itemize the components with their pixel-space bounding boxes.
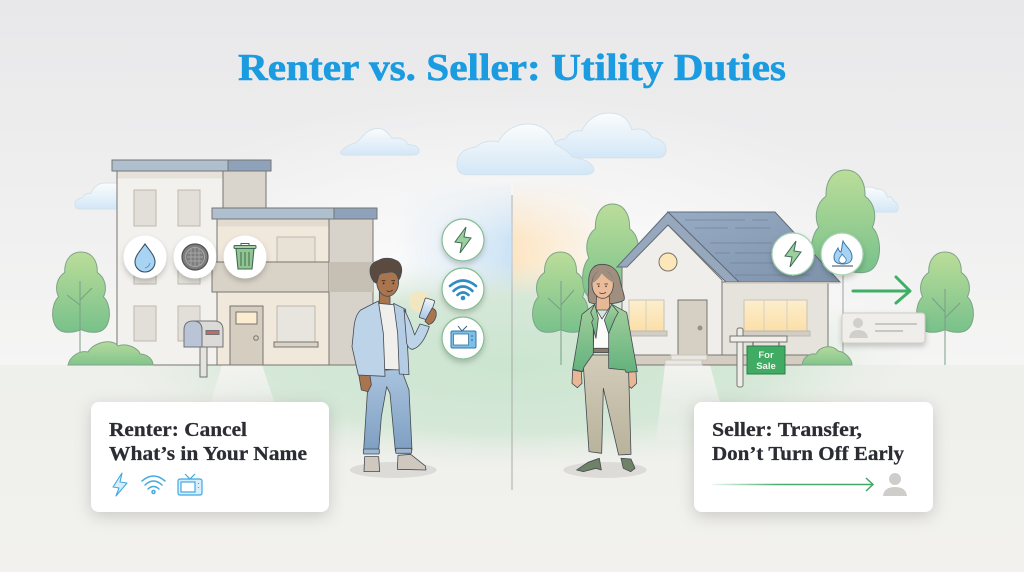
tree: behind house right	[811, 170, 880, 365]
front block	[212, 208, 377, 365]
icon: outline wifi	[142, 476, 165, 494]
cuffs	[363, 448, 412, 454]
gable roof edge	[617, 212, 739, 282]
tree: far right	[917, 252, 973, 365]
transfer arrow head	[866, 478, 873, 491]
hair	[370, 258, 402, 283]
pants	[583, 355, 631, 455]
center divider	[511, 195, 513, 490]
apartment building	[112, 160, 377, 365]
back block windows	[134, 190, 200, 341]
icon: outline bolt	[113, 473, 127, 496]
face	[592, 270, 613, 298]
tree: beside house	[583, 204, 642, 301]
seller heading: Don’t Turn Off Early	[712, 443, 904, 465]
shoes	[577, 458, 635, 472]
t-shirt	[379, 303, 401, 370]
mailbox	[184, 321, 223, 377]
icon: wifi	[442, 268, 484, 310]
renter heading: What’s in Your Name	[109, 443, 307, 465]
icon: television	[442, 317, 484, 359]
jacket	[573, 304, 637, 372]
cardigan left	[352, 301, 385, 376]
shadow	[350, 462, 437, 478]
cardigan right	[394, 303, 409, 375]
renter utility icons: water, sewer, trash	[124, 236, 266, 278]
hands	[572, 370, 637, 388]
icon: gas flame	[821, 233, 863, 275]
seller figure	[563, 264, 647, 478]
main roof	[668, 212, 840, 282]
seller heading: Seller: Transfer,	[712, 419, 862, 441]
clouds	[75, 113, 898, 212]
renter heading: Renter: Cancel	[109, 419, 247, 441]
icon: person	[883, 473, 907, 496]
phone	[419, 298, 435, 320]
icon: sewer grate	[174, 236, 216, 278]
seller utility icons	[772, 233, 863, 275]
shingle lines	[685, 220, 810, 275]
transfer line arrow	[712, 484, 872, 486]
door	[678, 300, 707, 355]
new account holder card	[842, 313, 925, 343]
hair	[588, 264, 624, 304]
head	[377, 267, 399, 296]
neck	[379, 292, 390, 307]
tree: behind seller	[533, 252, 588, 332]
icon: trash can	[224, 236, 266, 278]
icon: power	[772, 233, 814, 275]
icon: outline tv	[178, 474, 202, 495]
front door	[230, 306, 263, 365]
ground	[0, 260, 1024, 572]
phone glow	[409, 291, 430, 312]
bush: right	[802, 347, 852, 365]
fringe	[592, 269, 614, 283]
for sale sign: Sale	[756, 361, 776, 372]
belt	[593, 348, 609, 353]
shoes	[364, 454, 426, 472]
title: Renter vs. Seller: Utility Duties	[238, 47, 786, 89]
panel: renter	[91, 402, 329, 512]
for sale sign	[730, 328, 787, 387]
back block	[112, 160, 271, 365]
tree trunk: behind seller	[548, 281, 574, 365]
face details	[382, 281, 395, 292]
shadow	[563, 462, 647, 478]
icon: water drop	[124, 236, 166, 278]
jeans	[364, 369, 412, 451]
tree: far left	[53, 252, 109, 355]
panel: seller	[694, 402, 933, 512]
blouse	[593, 307, 610, 349]
face details	[597, 284, 608, 294]
phone hand	[425, 308, 436, 325]
seller heading	[712, 419, 904, 465]
house	[617, 212, 840, 365]
renter utility icons: power, internet, tv	[442, 219, 484, 359]
renter figure	[350, 258, 437, 478]
raised arm	[404, 309, 429, 349]
left hand	[359, 374, 371, 392]
eave	[726, 282, 840, 284]
renter heading	[109, 419, 307, 465]
window right	[743, 300, 810, 336]
round window	[659, 253, 677, 271]
icon: lightning bolt	[442, 219, 484, 261]
neck	[596, 292, 610, 310]
window left	[627, 300, 667, 336]
foundation	[622, 355, 828, 365]
walls	[722, 282, 828, 365]
bush: left	[68, 342, 153, 365]
sky background	[374, 186, 724, 291]
for sale sign: For	[758, 350, 774, 361]
transfer arrow	[853, 277, 910, 303]
steps	[665, 355, 707, 365]
